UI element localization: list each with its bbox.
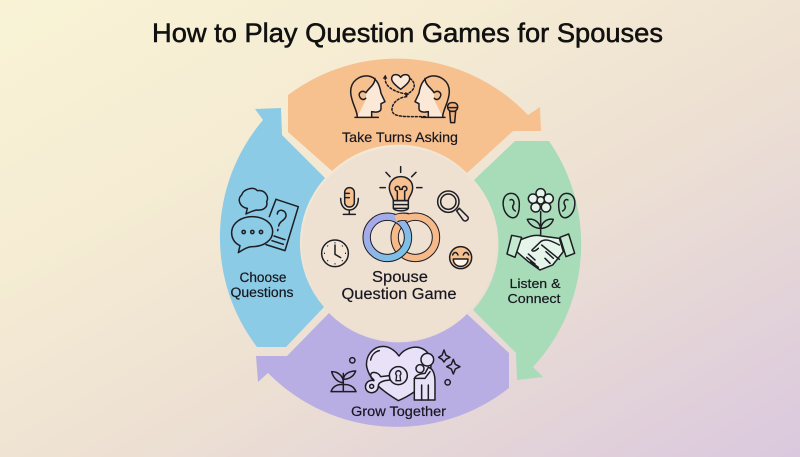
icon: lightbulb bbox=[380, 167, 422, 211]
panel: take turns asking bbox=[288, 59, 541, 173]
central disc bbox=[302, 147, 496, 341]
panel: center icons and label bbox=[322, 167, 472, 303]
icon: speech bubbles and question card bbox=[232, 188, 298, 253]
panel: listen and connect bbox=[473, 141, 581, 380]
panel: grow together bbox=[256, 313, 509, 427]
icon: sprout, heart with keyhole, people and sparkles bbox=[331, 346, 460, 401]
label: listen and connect second line: Connect bbox=[508, 291, 561, 306]
label: grow together: Grow Together bbox=[351, 404, 447, 419]
icon: linked rings bbox=[367, 217, 436, 258]
icon: microphone bbox=[341, 188, 358, 214]
label: spouse: Spouse bbox=[372, 269, 428, 286]
label: take turns asking: Take Turns Asking bbox=[342, 129, 458, 145]
panel: choose questions bbox=[220, 108, 325, 347]
icon: two faces with heart and microphone bbox=[351, 75, 458, 123]
orange arrow segment bbox=[288, 59, 541, 173]
label: question game: Question Game bbox=[342, 286, 456, 303]
icon: magnifying glass bbox=[438, 191, 468, 221]
label: listen and connect: Listen & bbox=[510, 276, 561, 291]
purple arrow segment bbox=[256, 313, 509, 427]
icon: ears, flower and handshake bbox=[503, 189, 575, 270]
label: choose questions: Choose bbox=[240, 270, 286, 285]
blue arrow segment bbox=[220, 108, 325, 347]
title: How to Play Question Games for Spouses bbox=[152, 18, 663, 48]
label: choose questions second line: Questions bbox=[230, 285, 294, 300]
icon: smiling face bbox=[450, 247, 472, 269]
center icon cluster bbox=[322, 167, 472, 269]
icon: clock bbox=[322, 240, 348, 267]
green arrow segment bbox=[473, 141, 581, 380]
